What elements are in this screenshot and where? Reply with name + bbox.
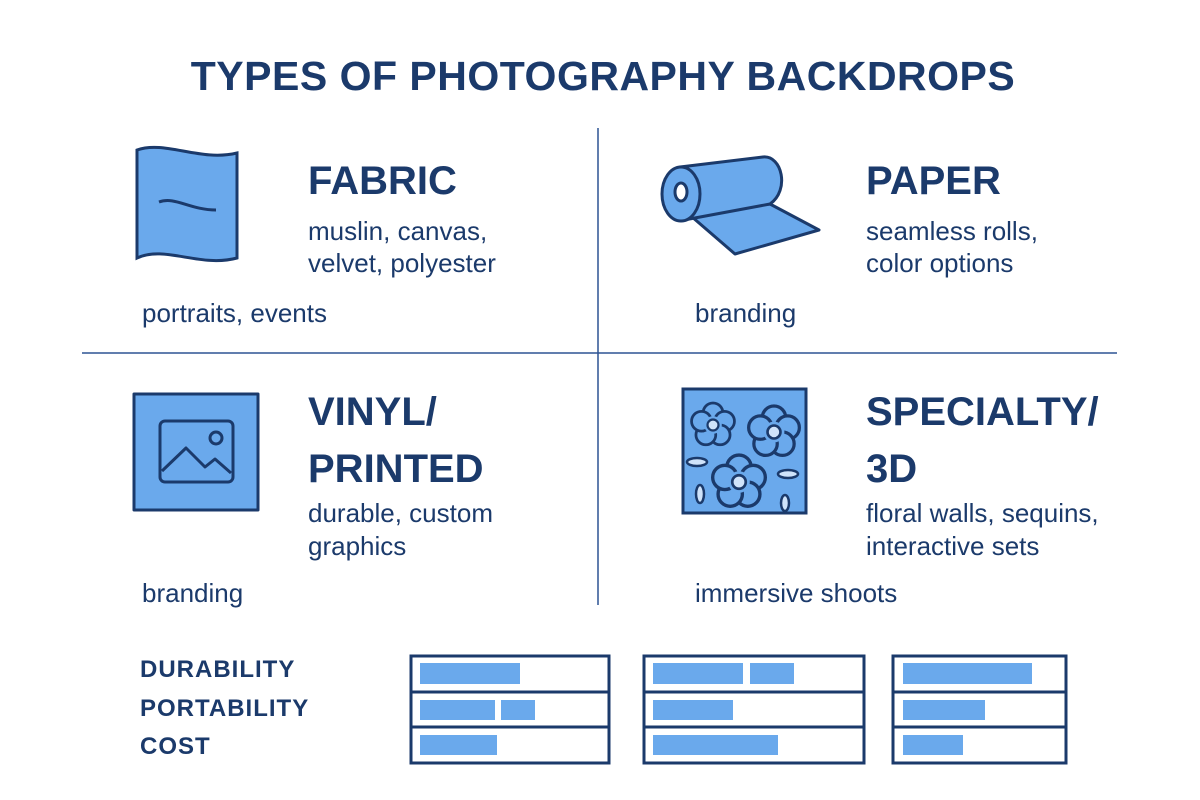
heading: specialty: SPECIALTY/ (866, 390, 1099, 434)
legend labels: DURABILITY (140, 656, 295, 683)
legend labels (140, 656, 309, 760)
chart: table 2 (644, 656, 864, 763)
heading: paper: PAPER (866, 159, 1001, 203)
panel: vinyl: graphics (308, 531, 406, 561)
text: vinyl use: branding (142, 578, 243, 608)
panel: specialty: 3D (866, 447, 917, 491)
panel: vinyl: PRINTED (308, 447, 484, 491)
heading: vinyl: VINYL/ (308, 390, 437, 434)
text: specialty details: floral walls, sequins, (866, 498, 1099, 528)
panel: fabric: velvet, polyester (308, 248, 496, 278)
panel: vinyl (134, 390, 493, 608)
legend labels: PORTABILITY (140, 695, 309, 722)
heading: fabric: FABRIC (308, 159, 457, 203)
chart: table 1 (411, 656, 609, 763)
title: TYPES OF PHOTOGRAPHY BACKDROPS (191, 53, 1015, 99)
text: paper details: seamless rolls, (866, 216, 1038, 246)
panel: paper: color options (866, 248, 1013, 278)
panel: specialty: interactive sets (866, 531, 1039, 561)
panel: fabric (137, 147, 496, 328)
icon: image (134, 394, 258, 510)
chart: table 3 (893, 656, 1066, 763)
panel: specialty (683, 389, 1099, 608)
text: specialty use: immersive shoots (695, 578, 897, 608)
icon: floral (683, 389, 806, 513)
text: paper use: branding (695, 298, 796, 328)
icon: paper roll (662, 157, 819, 254)
text: fabric materials: muslin, canvas, (308, 216, 487, 246)
text: fabric use: portraits, events (142, 298, 327, 328)
text: vinyl details: durable, custom (308, 498, 493, 528)
legend labels: COST (140, 733, 211, 760)
icon: fabric (137, 147, 237, 261)
panel: paper (662, 157, 1038, 328)
